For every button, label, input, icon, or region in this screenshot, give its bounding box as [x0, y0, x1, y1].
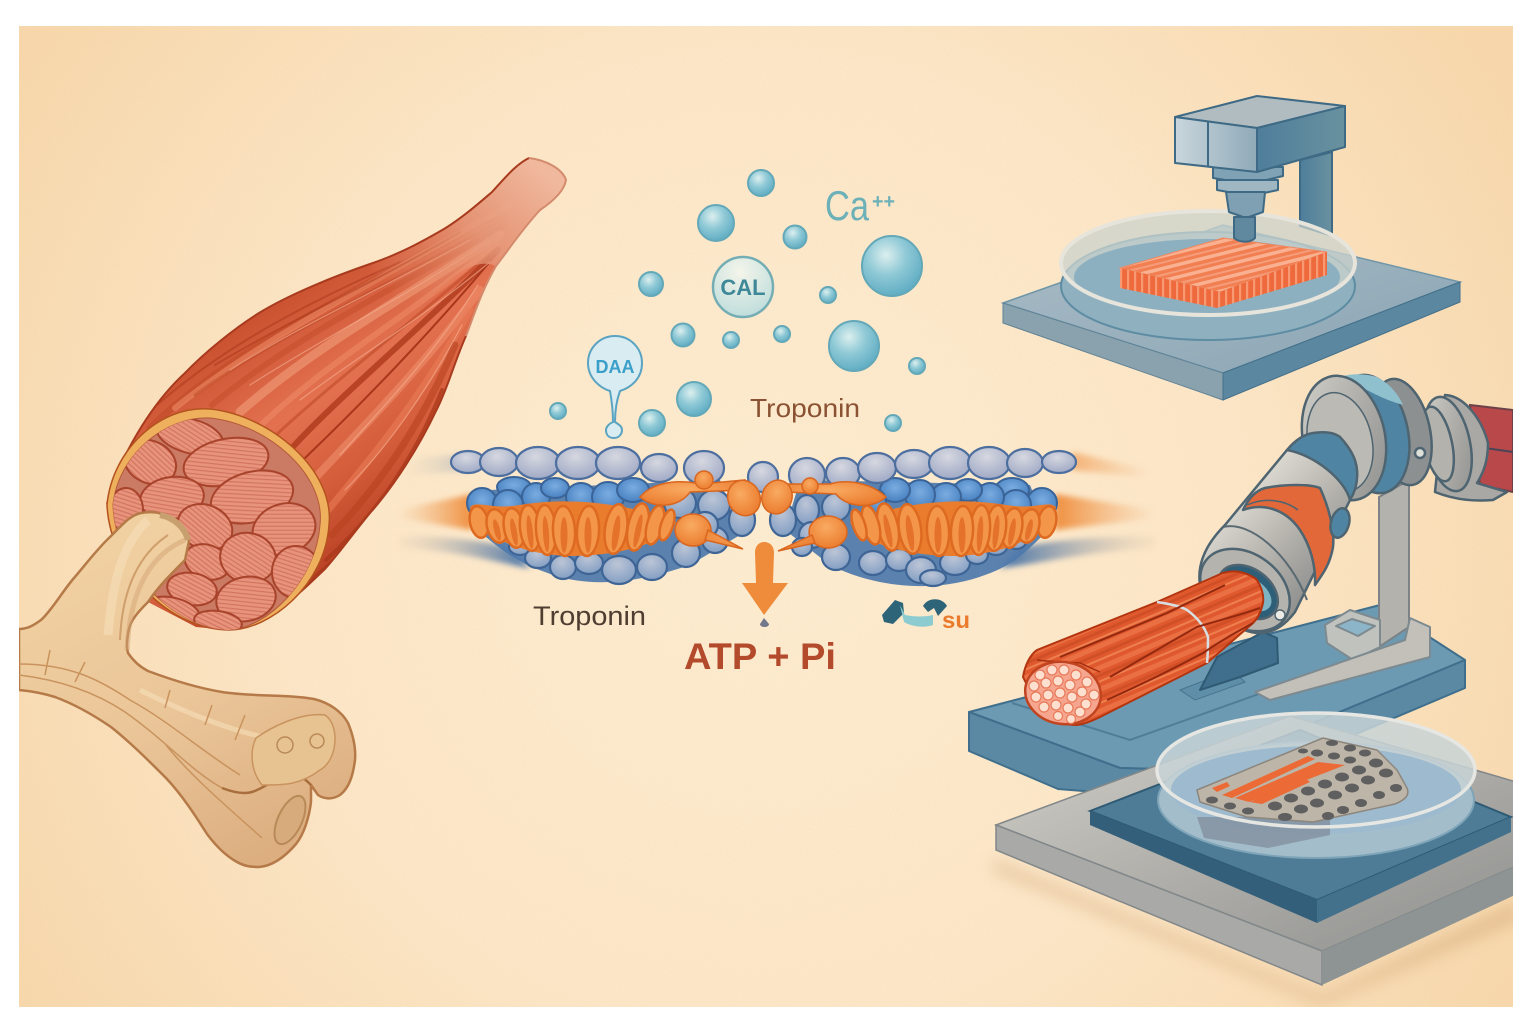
- blue base: [969, 605, 1465, 800]
- petri dish: [1060, 211, 1356, 340]
- blue lower mass: [478, 480, 1048, 586]
- bioprinted scaffold: [1197, 738, 1408, 848]
- bracket and clamp: [1255, 610, 1430, 700]
- ion label: Ca++: Ca: [825, 182, 870, 229]
- orange head knobs: [640, 471, 886, 551]
- bone: [19, 512, 355, 867]
- glass petri dish with scaffold: [1156, 713, 1476, 858]
- cut end of bundle: [1020, 656, 1106, 730]
- red sleeve: [1470, 405, 1513, 492]
- orange myosin band, right: [848, 501, 1059, 557]
- muscle with bone: [19, 158, 566, 867]
- printed tissue block: [1120, 238, 1327, 308]
- fading fibre wisps: [398, 452, 1155, 568]
- printer head: [1175, 96, 1345, 242]
- muscle cross-section: [107, 409, 329, 636]
- bubble labelled CAL: [713, 257, 773, 317]
- upper label: Troponin: Troponin: [750, 393, 860, 423]
- bubble labelled CAL: CAL: [720, 275, 766, 300]
- bioreactor robot arm with muscle: [969, 368, 1530, 1005]
- small garbled icon with su label: [882, 599, 970, 633]
- cultured muscle bundle: [1020, 571, 1263, 730]
- dish rim: [1157, 713, 1475, 827]
- gray-blue lower beads: [509, 488, 1026, 586]
- muscle support saddle: [1200, 632, 1278, 690]
- ion label: Ca++: [826, 190, 894, 220]
- gray platform: [996, 716, 1530, 985]
- ion label: Ca++: ++: [872, 191, 895, 213]
- dark blue plate: [1090, 730, 1511, 923]
- soft shadow under gray base: [990, 860, 1520, 1005]
- label: Troponin: Troponin: [533, 601, 646, 631]
- muscle belly: [107, 158, 566, 630]
- 3D printer with petri dish: [1003, 96, 1460, 400]
- blue globular row: [466, 476, 1058, 512]
- product label: ATP + Pi: ATP + Pi: [684, 636, 836, 677]
- small bubbles: [550, 170, 925, 436]
- dish rim: [1061, 211, 1355, 315]
- printer column: [1300, 152, 1332, 236]
- scaffold pores: [1206, 740, 1402, 821]
- support post: [1379, 480, 1409, 647]
- sarcomere filaments: [398, 447, 1155, 586]
- main arm barrel: [1184, 432, 1357, 648]
- gray actin bead chain: [451, 447, 1076, 492]
- arm joint and rear segment: [1291, 368, 1507, 508]
- orange myosin band, left: [467, 501, 678, 557]
- droplet bubble labelled DAA: [588, 336, 642, 438]
- down arrow to ATP: [742, 542, 788, 627]
- calcium bubbles: [550, 170, 925, 438]
- printer base plate: [1003, 225, 1460, 400]
- scaffold orange strips: [1212, 756, 1345, 804]
- small garbled icon with su label: su: [942, 607, 970, 633]
- droplet bubble labelled DAA: DAA: [596, 357, 634, 377]
